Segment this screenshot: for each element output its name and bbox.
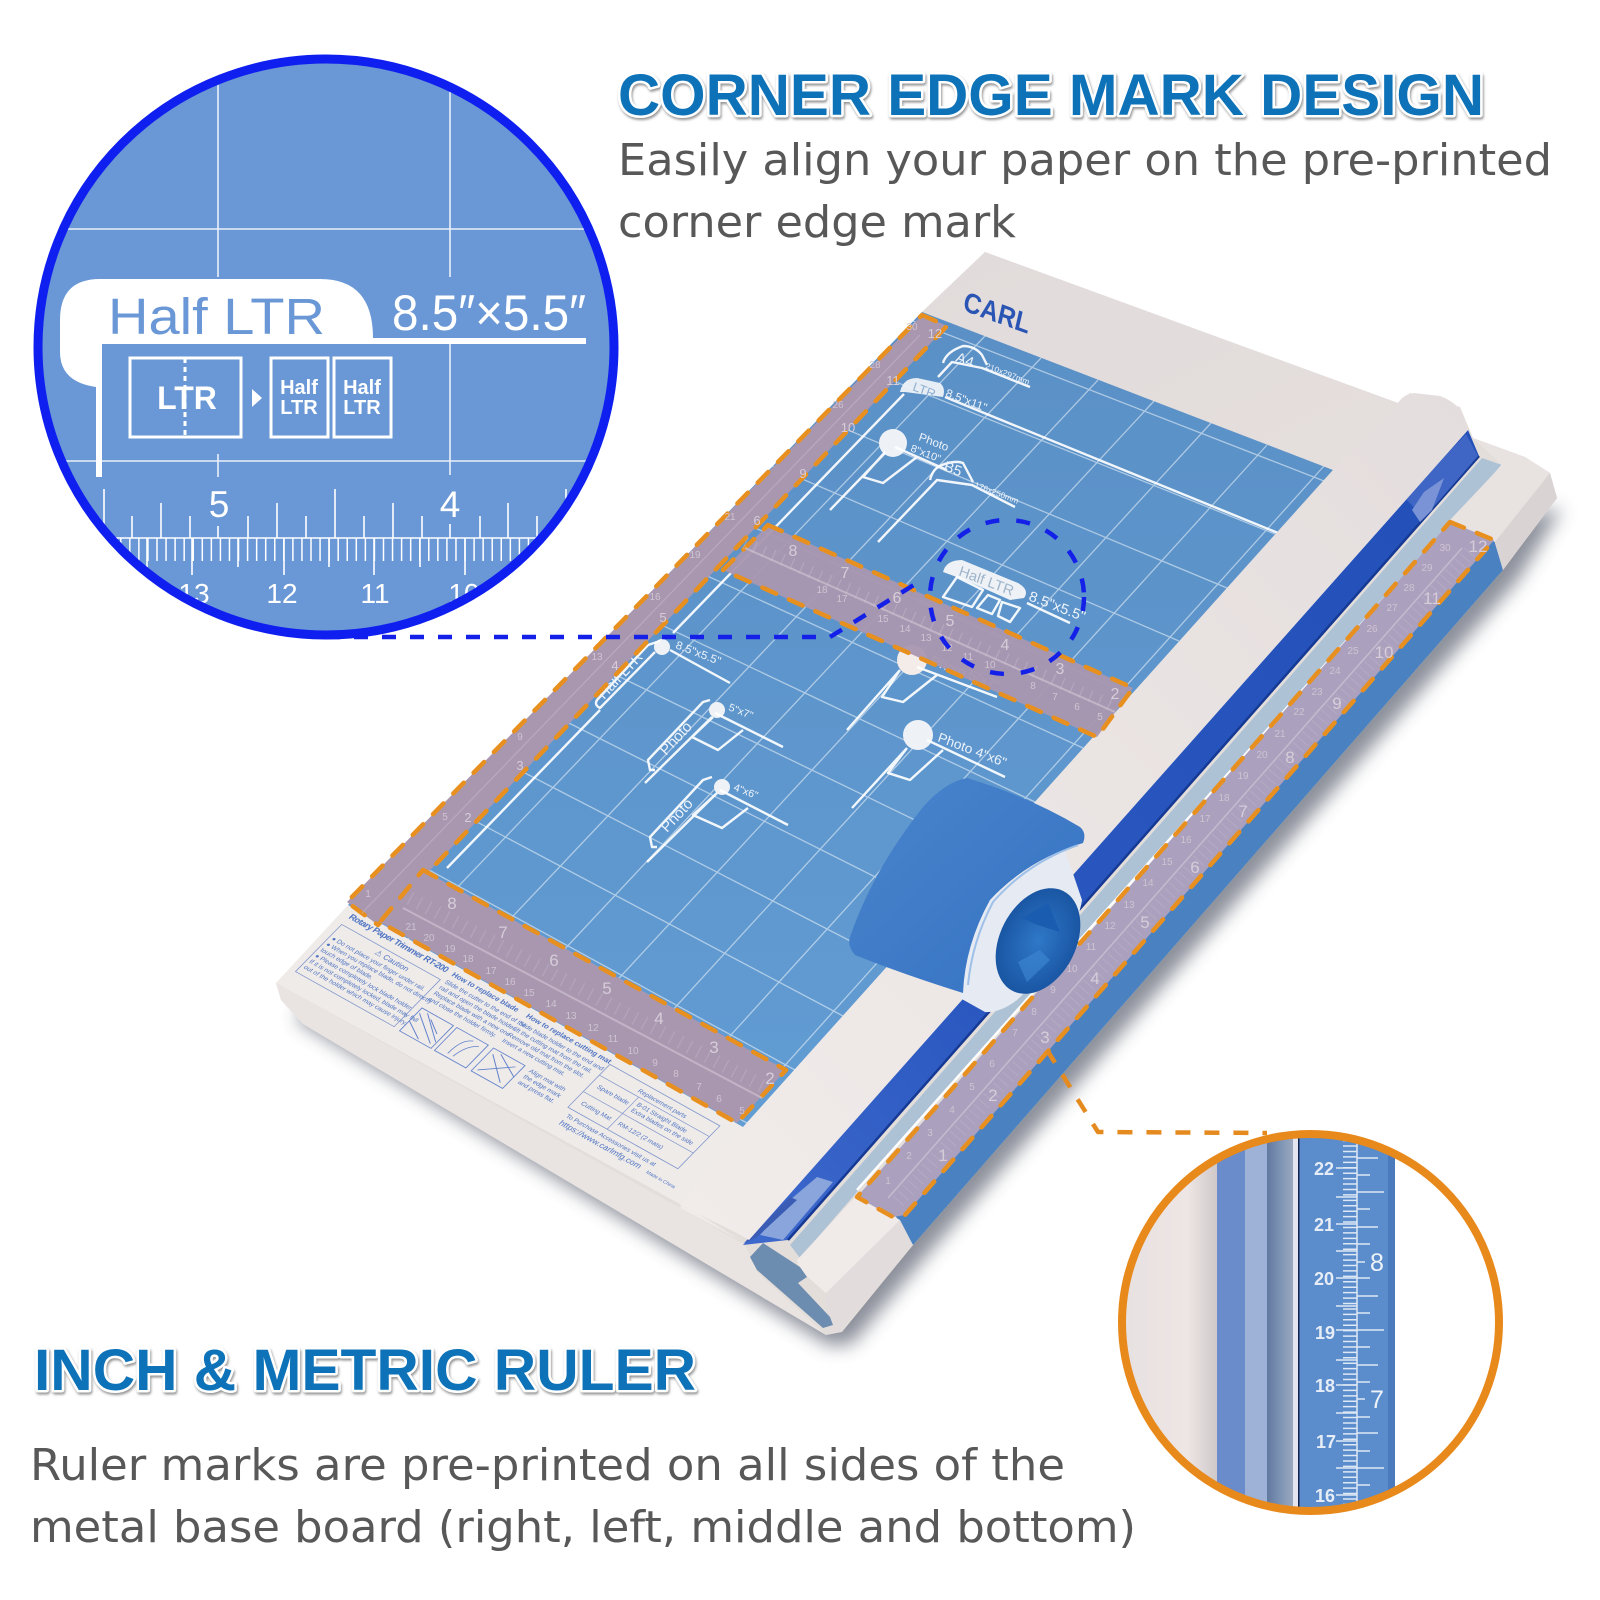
- Photo 4x6 guide left: [647, 777, 788, 862]
- replacement parts table: B-01 Straight Blade: [634, 1102, 689, 1135]
- blade instructions: Replace blade with a new one: [431, 991, 512, 1038]
- inch scale: 4: [440, 484, 460, 525]
- LTR guide: LTR: [911, 380, 937, 401]
- left ruler metric numbers: 26: [832, 400, 844, 411]
- Photo 4x6 guide left: 4"x6": [732, 782, 760, 802]
- mat grid: [351, 321, 1324, 1123]
- middle ruler metric numbers: 6: [1074, 702, 1080, 713]
- cutter bar: [680, 393, 1468, 1240]
- paper trimmer product: [276, 252, 1557, 1335]
- right ruler metric numbers: 17: [1199, 814, 1211, 825]
- middle ruler metric numbers: 11: [963, 652, 974, 663]
- blade instructions: Slide the cutter to the end of the: [443, 979, 528, 1029]
- bottom end cap: [797, 1195, 913, 1332]
- left ruler metric numbers: 5: [442, 812, 448, 823]
- middle ruler metric numbers: 14: [899, 624, 911, 635]
- cutting mat instructions: How to replace cutting mat: [524, 1012, 614, 1066]
- shadow under trimmer: [296, 508, 1562, 1346]
- Photo 5x7 guide right: Photo 5"x7": [929, 653, 1002, 693]
- inch scale: [100, 484, 570, 538]
- LTR box: LTR: [157, 380, 217, 416]
- caution box: ● Please completely lock blade holder.: [313, 953, 415, 1012]
- LTR box: [130, 358, 241, 437]
- middle ruler metric numbers: 17: [836, 594, 848, 605]
- right ruler metric numbers: 3: [927, 1128, 933, 1139]
- inch numbers: 7: [1370, 1386, 1384, 1414]
- right ruler metric numbers: 16: [1180, 835, 1192, 846]
- left ruler highlight: [347, 315, 947, 925]
- right ruler metric numbers: 26: [1366, 624, 1378, 635]
- right ruler metric numbers: 5: [969, 1082, 975, 1093]
- middle ruler metric numbers: 8: [1030, 681, 1036, 692]
- body text: corner edge mark: [618, 135, 1552, 248]
- Half LTR guide left: [447, 639, 730, 868]
- inch ticks: [1357, 1158, 1384, 1485]
- Half LTR label: Half LTR: [108, 288, 325, 345]
- white ring housing: [960, 850, 1082, 1012]
- blue side strip: [895, 540, 1503, 1245]
- cutting mat instructions: and press flat.: [516, 1080, 556, 1105]
- Photo 8x10 guide: 8"x10": [909, 443, 942, 465]
- bottom ruler metric numbers: 18: [462, 954, 474, 965]
- middle ruler metric numbers: 12: [941, 643, 953, 654]
- bottom ruler metric numbers: 17: [485, 966, 497, 977]
- bottom ruler inch numbers: 2: [765, 1069, 775, 1088]
- dashed orange leader line: [1047, 1050, 1267, 1133]
- replacement parts table: Cutting Mat: [579, 1101, 613, 1122]
- metric numbers: 18: [1315, 1376, 1335, 1396]
- cutter head: [849, 778, 1097, 1012]
- metric scale: [120, 538, 530, 603]
- cutting mat instructions: Slide blade holder to the end and: [517, 1021, 605, 1072]
- middle ruler metric numbers: [816, 585, 1103, 723]
- left ruler inch numbers: [464, 326, 942, 825]
- middle ruler highlight: [723, 525, 1133, 737]
- right ruler inch numbers: 2: [988, 1086, 998, 1105]
- middle ruler inch numbers: 5: [946, 613, 955, 630]
- middle ruler metric numbers: 18: [816, 585, 828, 596]
- instruction panel: Made in China: [644, 1170, 677, 1190]
- right ruler metric numbers: 10: [1066, 964, 1078, 975]
- inch numbers: [1371, 1253, 1383, 1408]
- Half LTR guide left: Half LTR: [594, 649, 647, 703]
- Photo 4x6 guide left: Photo: [657, 795, 697, 836]
- right ruler metric numbers: 29: [1421, 563, 1433, 574]
- right ruler metric numbers: 8: [1031, 1007, 1037, 1018]
- left ruler inch numbers: 2: [464, 810, 472, 825]
- right ruler inch numbers: 10: [1375, 643, 1393, 662]
- cutting mat instructions: [479, 1012, 614, 1111]
- LTR guide: [673, 378, 1278, 633]
- left ruler inch numbers: 4: [611, 658, 619, 673]
- ruler band: [1300, 1138, 1388, 1507]
- B5 guide: [878, 459, 1020, 542]
- Photo 8x10 guide: Photo: [917, 431, 950, 454]
- right ruler metric numbers: 13: [1123, 900, 1135, 911]
- metric numbers: [1314, 1159, 1336, 1506]
- bottom ruler metric numbers: 14: [545, 999, 557, 1010]
- right ruler highlight: [857, 522, 1494, 1217]
- middle ruler metric numbers: 10: [984, 660, 996, 671]
- left ruler metric numbers: 30: [906, 322, 918, 333]
- handle highlight: [968, 845, 1078, 985]
- body text: ruler: metal base board (right, left, middle and bottom): [30, 1502, 1136, 1553]
- right ruler inch numbers: 9: [1332, 694, 1342, 713]
- right ruler metric numbers: 12: [1104, 921, 1116, 932]
- right ruler inch numbers: 4: [1090, 969, 1100, 988]
- right ruler inch numbers: 5: [1140, 913, 1150, 932]
- blade instructions: How to replace blade: [450, 971, 521, 1014]
- Half LTR guide under magnifier: [943, 560, 1087, 625]
- A4 guide: A4: [954, 350, 976, 371]
- right ruler metric numbers: 1: [885, 1176, 891, 1187]
- body text: corner edge mark: corner edge mark: [618, 197, 1017, 248]
- top plate: [922, 252, 1398, 470]
- right ruler metric numbers: 14: [1142, 878, 1154, 889]
- caution box: ● When you replace blade, do not directly: [324, 942, 434, 1005]
- middle ruler inch numbers: 4: [1001, 637, 1010, 654]
- right ruler metric numbers: 2: [906, 1151, 912, 1162]
- middle ruler inch numbers: 3: [1056, 661, 1065, 678]
- magnifier: ruler: [1118, 1129, 1499, 1515]
- right ruler inch numbers: 7: [1238, 802, 1248, 821]
- bottom ruler inch numbers: 5: [602, 979, 612, 998]
- metric numbers: 16: [1315, 1486, 1335, 1506]
- bottom ruler metric numbers: 20: [423, 933, 435, 944]
- bottom ruler metric numbers: 19: [444, 944, 456, 955]
- left ruler inch numbers: 11: [886, 373, 900, 388]
- blue handle: [849, 778, 1084, 993]
- right ruler metric numbers: 19: [1237, 771, 1249, 782]
- LTR guide: 8.5"x11": [944, 387, 989, 414]
- Photo 5x7 guide left: [645, 700, 783, 783]
- right ruler metric numbers: 27: [1386, 603, 1398, 614]
- cutting mat instructions: Align mat with: [527, 1068, 567, 1093]
- Photo 8x10 guide: [830, 429, 950, 510]
- top right end cap: [1450, 438, 1557, 570]
- left ruler metric numbers: 21: [724, 512, 736, 523]
- diagrams: [400, 1008, 525, 1088]
- replacement parts table: [568, 1064, 720, 1169]
- bottom ruler inch numbers: 7: [498, 923, 508, 942]
- left ruler inch numbers: 9: [799, 466, 807, 481]
- right ruler inch numbers: [938, 537, 1487, 1165]
- instruction panel: https://www.carlmfg.com: [557, 1118, 644, 1170]
- arrow: [252, 389, 262, 407]
- middle ruler metric numbers: 15: [877, 614, 889, 625]
- metric numbers: 17: [1316, 1432, 1336, 1452]
- middle ruler inch numbers: 8: [789, 543, 798, 560]
- right ruler metric numbers: 30: [1439, 543, 1451, 554]
- metric scale: 12: [266, 578, 298, 609]
- grid lines: [60, 50, 590, 477]
- cutting mat instructions: the edge mark: [521, 1074, 563, 1100]
- Photo 4x6 guide right: Photo 4"x6": [936, 730, 1009, 770]
- inch numbers: 8: [1370, 1249, 1384, 1277]
- left ruler inch numbers: 10: [841, 420, 855, 435]
- A4 guide: 210x297mm: [984, 362, 1031, 387]
- metric numbers: 20: [1314, 1269, 1334, 1289]
- right ruler inch numbers: 8: [1285, 748, 1295, 767]
- dashed blue callout circle: [930, 520, 1084, 674]
- bottom ruler inch numbers: 6: [549, 951, 559, 970]
- right ruler metric numbers: 4: [949, 1105, 955, 1116]
- Half LTR box 2: LTR: [343, 397, 381, 419]
- middle ruler metric numbers: 7: [1052, 692, 1058, 703]
- bottom ruler inch numbers: 3: [709, 1038, 719, 1057]
- right ruler metric numbers: 20: [1256, 750, 1268, 761]
- left ruler metric numbers: 13: [591, 652, 603, 663]
- replacement parts table: RM-12/2 (2 mats): [616, 1121, 665, 1151]
- right ruler metric numbers: 6: [989, 1059, 995, 1070]
- left ruler inch numbers: 5: [659, 610, 667, 625]
- middle ruler metric numbers: 5: [1097, 712, 1103, 723]
- left ruler metric numbers: 9: [517, 732, 523, 743]
- Half LTR box 2: [334, 358, 391, 437]
- right ruler metric numbers: 22: [1293, 707, 1305, 718]
- Half LTR white tab: [60, 279, 586, 477]
- bottom ruler highlight: [380, 870, 786, 1123]
- Half LTR guide left: 8.5"x5.5": [674, 639, 723, 668]
- replacement parts table: Extra blades on the side: [629, 1108, 695, 1147]
- Half LTR box 1: LTR: [280, 397, 318, 419]
- right ruler metric numbers: 23: [1311, 687, 1323, 698]
- right ruler metric numbers: 25: [1347, 646, 1359, 657]
- inch scale: 5: [209, 484, 229, 525]
- B5 guide: 176x250mm: [973, 481, 1020, 506]
- middle ruler inch numbers: 2: [1111, 686, 1120, 703]
- middle ruler metric numbers: 13: [920, 633, 932, 644]
- magnifier: corner edge mark: [38, 50, 614, 635]
- metric numbers: 19: [1315, 1323, 1335, 1343]
- replacement parts table: Replacement parts: [636, 1088, 689, 1120]
- right ruler metric numbers: 9: [1050, 985, 1056, 996]
- replacement parts table: Spare blade: [595, 1084, 631, 1107]
- cutting mat: [348, 312, 1333, 1127]
- blade instructions: [426, 971, 537, 1046]
- left ruler metric numbers: 16: [649, 592, 661, 603]
- Half LTR box 1: Half: [280, 377, 318, 399]
- trimmer body silhouette: [276, 252, 1557, 1335]
- rail channel: [743, 430, 1479, 1245]
- cutting mat instructions: Remove old mat from the slot.: [506, 1032, 586, 1079]
- right ruler inch numbers: 1: [938, 1146, 948, 1165]
- caution box: [296, 924, 452, 1033]
- CARL logo: CARL: [961, 286, 1033, 340]
- bottom ruler metric numbers: 7: [696, 1082, 702, 1093]
- metric numbers: 21: [1314, 1215, 1334, 1235]
- right ruler metric numbers: 15: [1161, 857, 1173, 868]
- Photo 5x7 guide right: [847, 645, 1002, 730]
- right ruler inch numbers: 3: [1040, 1028, 1050, 1047]
- caution box: ⚠ Caution: [373, 949, 411, 973]
- right ruler inch numbers: 11: [1423, 589, 1441, 608]
- right ruler metric numbers: 21: [1274, 729, 1286, 740]
- middle ruler inch numbers: 6: [893, 590, 902, 607]
- left ruler inch numbers: 3: [516, 758, 524, 773]
- bottom ruler metric numbers: 15: [523, 988, 535, 999]
- bottom ruler metric numbers: 16: [504, 977, 516, 988]
- bottom ruler metric numbers: 6: [716, 1094, 722, 1105]
- bottom ruler metric numbers: 21: [405, 922, 417, 933]
- magnified mat content: [60, 50, 590, 609]
- caution box: out of the holder which may cause injury.: [302, 964, 409, 1027]
- metric scale: 13: [178, 578, 210, 609]
- dashed blue leader line: [326, 578, 925, 637]
- B5 guide: B5: [942, 459, 964, 480]
- right ruler inch numbers: 6: [1190, 858, 1200, 877]
- bottom ruler inch numbers: 8: [447, 894, 457, 913]
- right ruler inch numbers: 12: [1469, 537, 1487, 556]
- heading: inch and metric ruler: INCH & METRIC RULER: [34, 1338, 696, 1403]
- lower translucent blade guard: [760, 1177, 833, 1240]
- bottom ruler metric numbers: 12: [587, 1023, 599, 1034]
- caution box: touch edge of blade.: [318, 947, 375, 981]
- bottom ruler metric numbers: 8: [673, 1069, 679, 1080]
- right ruler metric numbers: 11: [1086, 942, 1097, 953]
- caution box: ● Do not place your finger under rail.: [330, 936, 427, 992]
- instruction panel: [291, 912, 736, 1190]
- left ruler inch numbers: 6: [753, 513, 761, 528]
- Half LTR box 2: Half: [343, 377, 381, 399]
- middle ruler inch numbers: [789, 543, 1120, 703]
- transparent blue blade disc: [979, 874, 1097, 1008]
- bottom ruler inch numbers: [447, 894, 775, 1088]
- right ruler metric numbers: 7: [1012, 1028, 1018, 1039]
- Half LTR box 1: [271, 358, 328, 437]
- left ruler inch numbers: 12: [928, 326, 942, 341]
- left ruler metric numbers: 28: [869, 360, 881, 371]
- bottom ruler metric numbers: 5: [739, 1106, 745, 1117]
- body text: ruler: [30, 1440, 1136, 1553]
- right ruler metric numbers: 18: [1218, 793, 1230, 804]
- heading: corner edge mark design: CORNER EDGE MARK DESIGN: [618, 63, 1484, 128]
- metric scale: 11: [360, 578, 390, 609]
- bottom ruler inch numbers: 4: [654, 1009, 664, 1028]
- cream front face: [276, 983, 826, 1335]
- panel title: Rotary Paper Trimmer RT-200: [347, 912, 451, 974]
- blade instructions: rail and open the blade holder.: [437, 985, 518, 1033]
- Photo 4x6 guide right: [852, 720, 1009, 808]
- bottom ruler metric numbers: 11: [608, 1034, 619, 1045]
- cutting mat instructions: lift the cutting mat from the rail.: [511, 1026, 594, 1075]
- bottom ruler metric numbers: [405, 922, 745, 1117]
- size label: 8.5″×5.5″: [392, 285, 586, 341]
- caution box: If it is not completely locked, blade may fall: [307, 959, 420, 1024]
- glass strip: [790, 458, 1505, 1258]
- left ruler metric numbers: [365, 322, 918, 900]
- right ruler metric numbers: [885, 543, 1451, 1187]
- Half LTR guide under magnifier: Half LTR: [957, 564, 1016, 600]
- cutting mat instructions: Insert a new cutting mat.: [500, 1038, 567, 1077]
- A4 guide: [938, 346, 1031, 387]
- blade instructions: and close the holder firmly.: [426, 996, 498, 1039]
- bottom instruction plate: [276, 905, 746, 1240]
- magnifier ring: [1122, 1134, 1499, 1511]
- body text: corner edge mark: Easily align your paper on the pre-printed: [618, 135, 1552, 186]
- magnifier ring: [38, 59, 614, 635]
- middle ruler inch numbers: 7: [841, 565, 850, 582]
- metric scale: 10: [448, 578, 480, 609]
- bottom ruler metric numbers: 10: [627, 1046, 639, 1057]
- right ruler metric numbers: 28: [1403, 583, 1415, 594]
- website: To Purchase Accessories visit us at: [564, 1113, 658, 1168]
- rail end piece: [750, 1243, 833, 1328]
- upper translucent blade guard: [1405, 434, 1478, 518]
- Photo 5x7 guide left: 5"x7": [727, 702, 755, 722]
- magnified trimmer edge: [1118, 1129, 1395, 1515]
- left ruler metric numbers: 19: [689, 550, 701, 561]
- bottom ruler metric numbers: 9: [652, 1058, 658, 1069]
- Photo 5x7 guide left: Photo: [656, 718, 696, 759]
- Half LTR guide under magnifier: 8.5"x5.5": [1027, 589, 1087, 625]
- bottom ruler metric numbers: 13: [565, 1011, 577, 1022]
- body text: ruler: Ruler marks are pre-printed on all sides of the: [30, 1440, 1065, 1491]
- metric numbers: 22: [1314, 1159, 1334, 1179]
- right ruler metric numbers: 24: [1329, 666, 1341, 677]
- metric ticks: [1336, 1129, 1384, 1515]
- left ruler metric numbers: 1: [365, 889, 371, 900]
